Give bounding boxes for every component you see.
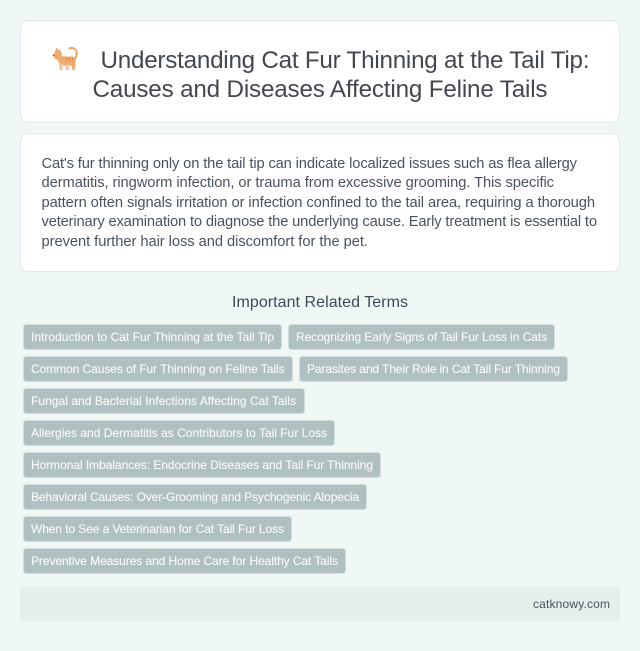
tag (24, 516, 292, 542)
tag: Allergies and Dermatitis as Contributors to Tail Fur Loss (31, 426, 327, 440)
tag: Hormonal Imbalances: Endocrine Diseases and Tail Fur Thinning (31, 458, 373, 472)
tag: Preventive Measures and Home Care for Healthy Cat Tails (31, 554, 338, 568)
title: Understanding Cat Fur Thinning at the Tail Tip: (100, 47, 590, 74)
description text: pattern often signals irritation or infection confined to the tail area, requiring a thorough (42, 195, 595, 211)
tag (24, 452, 380, 478)
description text: veterinary examination to diagnose the underlying cause. Early treatment is essential to (42, 214, 597, 230)
tag: Behavioral Causes: Over-Grooming and Psychogenic Alopecia (31, 490, 359, 504)
tag (24, 388, 304, 414)
panel: title card (20, 20, 620, 122)
tag (24, 484, 366, 510)
heading: important related terms: Important Related Terms (232, 294, 408, 311)
tag (288, 324, 554, 350)
tag: Parasites and Their Role in Cat Tail Fur Thinning (307, 362, 560, 376)
tag: Fungal and Bacterial Infections Affecting Cat Tails (31, 394, 296, 408)
tag: When to See a Veterinarian for Cat Tail Fur Loss (31, 522, 284, 536)
description text: Cat's fur thinning only on the tail tip can indicate localized issues such as flea allergy (42, 156, 578, 172)
footer source text: catknowy.com (533, 597, 610, 611)
panel: description card (20, 134, 620, 272)
title (92, 47, 590, 103)
icon: orange cat (53, 48, 77, 70)
description text (42, 156, 597, 250)
title: Causes and Diseases Affecting Feline Tails (92, 76, 548, 103)
tag (300, 356, 568, 382)
tag (24, 548, 346, 574)
tag: Introduction to Cat Fur Thinning at the Tail Tip (31, 330, 274, 344)
panel: related term tags (24, 324, 568, 574)
description text: prevent further hair loss and discomfort for the pet. (42, 234, 368, 250)
tag: Common Causes of Fur Thinning on Feline Tails (31, 362, 284, 376)
tag (24, 420, 334, 446)
tag: Recognizing Early Signs of Tail Fur Loss in Cats (296, 330, 547, 344)
footer bar (20, 587, 620, 621)
tag (24, 324, 282, 350)
tag (24, 356, 292, 382)
description text: dermatitis, ringworm infection, or trauma from excessive grooming. This specific (42, 175, 554, 191)
